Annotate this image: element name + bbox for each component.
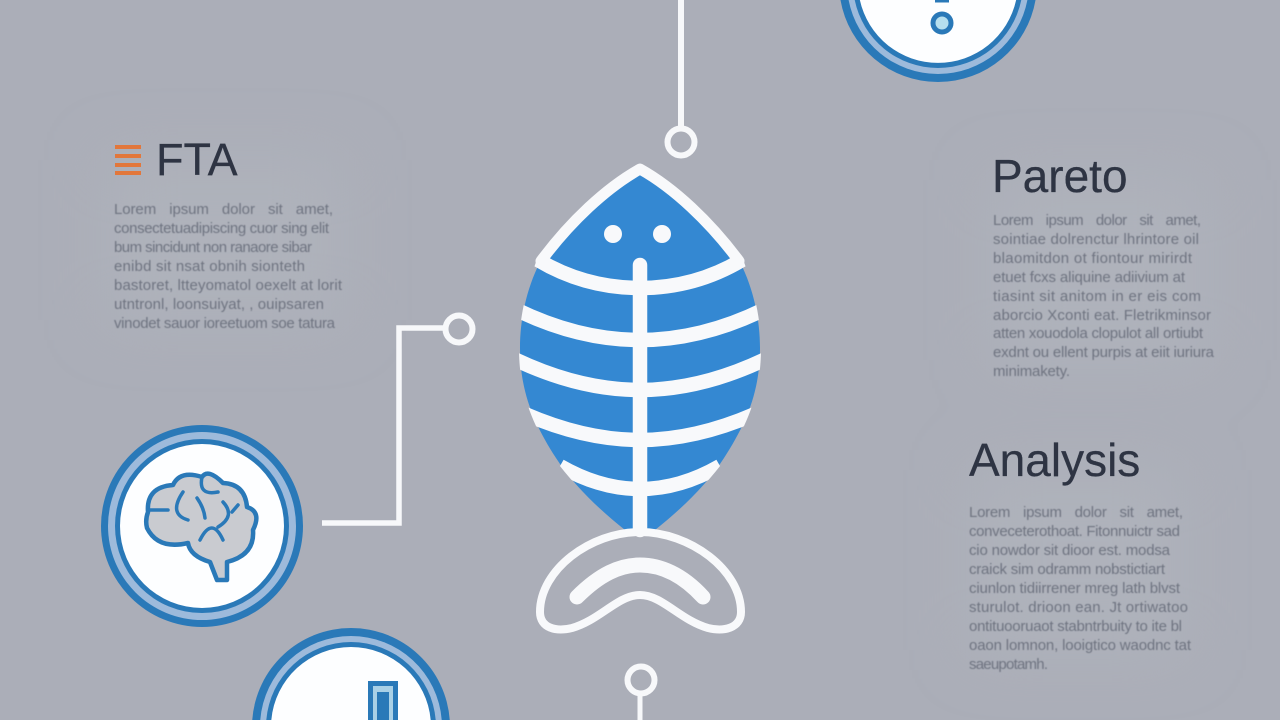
text block: FTA body: utntronl, loonsuiyat, , ouipsaren	[114, 296, 324, 313]
icon: brain	[146, 474, 256, 580]
icon: bar chart badge	[252, 628, 450, 720]
fish eyes	[604, 225, 671, 243]
text block: Analysis body: cio nowdor sit dioor est. modsa	[969, 542, 1171, 559]
fish head outline	[541, 169, 739, 261]
text block: FTA body: bum sincidunt non ranaore sibar	[114, 239, 312, 256]
text block: Analysis body: saeupotamh.	[969, 656, 1048, 673]
text block: Analysis body: conveceterothoat. Fitonnuictr sad	[969, 523, 1180, 540]
fish tail outline	[540, 532, 741, 629]
text block: Analysis body: craick sim odramm nobstictiart	[969, 561, 1166, 578]
fish skeleton icon	[512, 165, 768, 629]
text block: Pareto body: blaomitdon ot fiontour mirirdt	[993, 250, 1193, 267]
heading: Pareto: Pareto	[992, 150, 1128, 202]
text block: Pareto body: exdnt ou ellent purpis at eiit iuriura	[993, 344, 1215, 361]
text block: FTA body: enibd sit nsat obnih sionteth	[114, 258, 305, 275]
text block: Pareto body: Lorem ipsum dolor sit amet,	[993, 212, 1201, 229]
text block: Pareto body: minimakety.	[993, 363, 1070, 380]
text block: Pareto body: atten xouodola clopulot all ortiubt	[993, 325, 1204, 342]
icon: brain badge	[101, 425, 303, 627]
text block: FTA body: bastoret, ltteyomatol oexelt at lorit	[114, 277, 343, 294]
heading: FTA: FTA	[156, 134, 238, 185]
icon: bar	[368, 681, 398, 720]
panel: Pareto	[992, 150, 1215, 380]
text block: Analysis body	[969, 504, 1192, 673]
text block: Analysis body: sturulot. drioon ean. Jt ortiwatoo	[969, 599, 1188, 616]
text block: Pareto body: aborcio Xconti eat. Fletrikminsor	[993, 307, 1211, 324]
text block: Analysis body: oaon lomnon, looigtico waodnc tat	[969, 637, 1192, 654]
panel: Analysis	[969, 434, 1192, 673]
fish tail inner arc	[577, 565, 703, 597]
connector: brain to fish	[322, 316, 472, 523]
panel: FTA	[114, 134, 343, 332]
icon: orange list	[115, 145, 141, 175]
text block: Pareto body: etuet fcxs aliquine adiivium at	[993, 269, 1186, 286]
connector: top line to fish	[668, 0, 694, 156]
connector: bottom line to tail	[628, 666, 654, 720]
fish body	[520, 165, 760, 530]
text block: Pareto body: tiasint sit anitom in er eis com	[993, 288, 1201, 305]
text block: Pareto body	[993, 212, 1215, 380]
text block: FTA body	[114, 201, 343, 332]
text block: Pareto body: sointiae dolrenctur lhrintore oil	[993, 231, 1199, 248]
text block: Analysis body: Lorem ipsum dolor sit amet,	[969, 504, 1183, 521]
text block: Analysis body: ontituooruaot stabntrbuity to ite bl	[969, 618, 1182, 635]
icon: dot badge	[840, 0, 1036, 82]
text block: FTA body: Lorem ipsum dolor sit amet,	[114, 201, 333, 218]
text block: FTA body: consectetuadipiscing cuor sing elit	[114, 220, 330, 237]
text block: Analysis body: ciunlon tidiirrener mreg lath blvst	[969, 580, 1181, 597]
heading: Analysis: Analysis	[969, 434, 1140, 486]
fish spine	[633, 265, 647, 530]
fish ribs	[512, 260, 768, 489]
icon: exclamation dot	[933, 0, 951, 32]
text block: FTA body: vinodet sauor ioreetuom soe tatura	[114, 315, 336, 332]
